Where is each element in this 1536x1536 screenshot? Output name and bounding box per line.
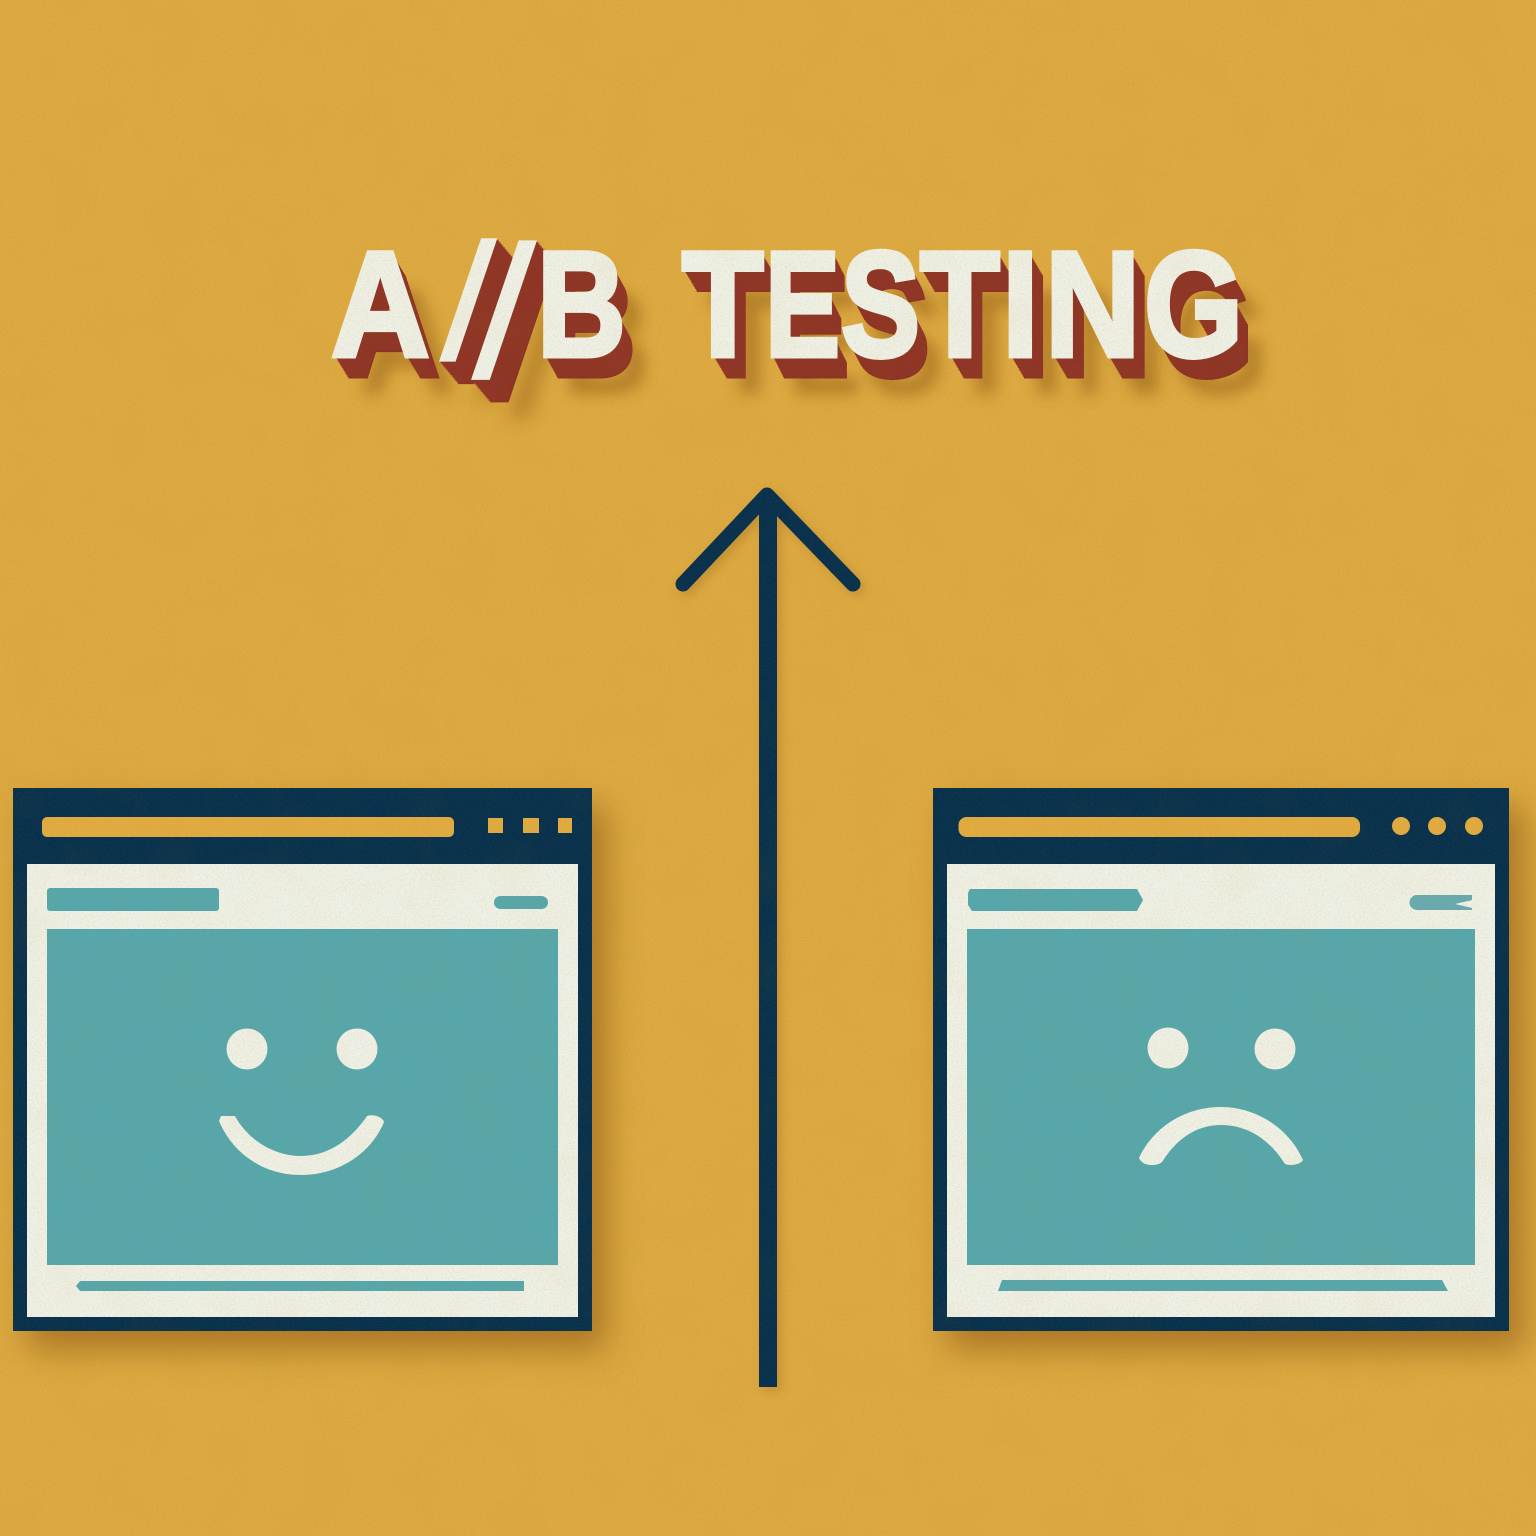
panel: variant B browser window, sad (933, 788, 1509, 1331)
window controls A: squares (488, 818, 572, 833)
title: A//B TESTING: / (439, 208, 497, 396)
header pill A (494, 896, 548, 909)
sad face (1139, 1028, 1303, 1165)
title: A//B TESTING: A (331, 220, 430, 388)
window frame B (933, 788, 1509, 1331)
footer bar A (76, 1281, 524, 1291)
title: A//B TESTING (331, 207, 1268, 424)
title: A//B TESTING: I (1002, 220, 1039, 388)
title: A//B TESTING: / (471, 207, 537, 419)
title: A//B TESTING: T (682, 220, 764, 388)
footer bar B (998, 1280, 1448, 1291)
smiley face (219, 1028, 384, 1175)
content area B (967, 929, 1475, 1265)
title: A//B TESTING: T (920, 220, 1000, 388)
title: A//B TESTING: N (1045, 220, 1140, 388)
header pill B (1410, 895, 1472, 910)
title: A//B TESTING: S (841, 220, 920, 388)
title: A//B TESTING: G (1144, 220, 1243, 388)
content area A (47, 929, 558, 1265)
header bar A (47, 888, 219, 911)
page area B (947, 864, 1495, 1317)
address bar B (958, 817, 1360, 837)
header bar B (968, 889, 1143, 911)
window frame A (13, 788, 592, 1331)
title: A//B TESTING: B (537, 220, 626, 388)
title: A//B TESTING: E (765, 220, 840, 388)
arrow: upward navy arrow (683, 495, 853, 1387)
panel: variant A browser window, happy (13, 788, 592, 1331)
address bar A (42, 817, 454, 837)
window controls B: dots (1392, 817, 1483, 835)
page area A (27, 864, 578, 1317)
